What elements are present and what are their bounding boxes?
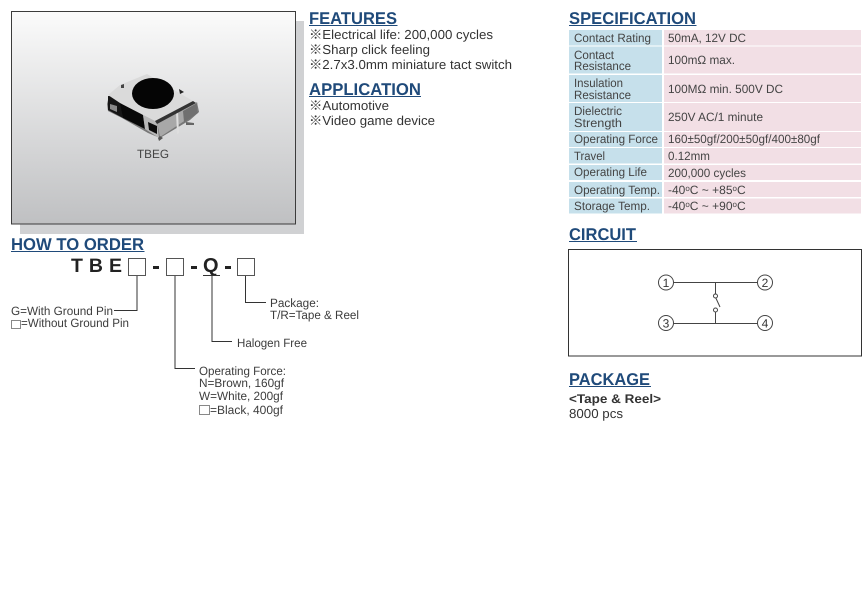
table: specification: Contact [574,48,615,62]
table: specification [569,30,861,214]
table: specification: Operating Temp. [574,183,660,197]
text: ground pin option [11,304,129,330]
text: ground pin option: G=With Ground Pin [11,304,113,318]
table: specification: 160±50gf/200±50gf/400±80gf [668,132,821,146]
panel: circuit diagram: 4 [762,316,769,330]
text: application list [309,98,435,128]
text: operating force option: W=White, 200gf [199,389,284,403]
table: specification: C [737,183,746,197]
heading: circuit: CIRCUIT [569,225,637,244]
table: specification: Resistance [574,88,631,102]
panel: product photo [12,12,304,234]
text: halogen free: Halogen Free [237,336,307,350]
text: features list: ※Electrical life: 200,000 cycles [309,27,494,42]
table: specification: C ~ +90 [690,199,733,213]
table: specification: -40 [668,183,685,197]
text: package option [270,296,359,322]
table: specification: Operating Life [574,165,647,179]
order connector lines [114,276,266,368]
label: TBEG: TBEG [137,147,169,161]
heading: package: PACKAGE [569,370,650,389]
table: specification: 100mΩ max. [668,53,735,67]
table: specification: C ~ +85 [690,183,733,197]
text: package details [569,392,661,421]
table: specification: Dielectric [574,104,622,118]
text: package details: 8000 pcs [569,406,624,421]
table: specification: Travel [574,149,605,163]
text: features list: ※2.7x3.0mm miniature tact switch [309,57,512,72]
panel: circuit diagram: 2 [762,276,769,290]
panel: circuit diagram: 3 [663,316,670,330]
heading: how to order: HOW TO ORDER [11,235,144,254]
table: specification: Resistance [574,59,631,73]
order code: TBE [71,255,122,277]
text: application list: ※Automotive [309,98,389,113]
table: specification: 50mA, 12V DC [668,31,746,45]
text: package option: T/R=Tape & Reel [270,308,359,322]
table: specification: -40 [668,199,685,213]
heading: specification: SPECIFICATION [569,9,696,28]
text: operating force option: N=Brown, 160gf [199,376,285,390]
table: specification: o [685,184,690,193]
text: operating force option [199,364,286,417]
table: specification: o [732,184,738,193]
table: specification: Strength [574,116,622,130]
table: specification: Contact Rating [574,31,651,45]
text: application list: ※Video game device [309,113,435,128]
panel: circuit diagram [568,250,862,356]
table: specification: 200,000 cycles [668,166,746,180]
text: operating force option: Operating Force: [199,364,286,378]
table: specification: o [732,200,738,209]
icon: TBEG tact switch [107,74,199,141]
text: features list [309,27,512,72]
text: package details: <Tape & Reel> [569,392,661,406]
heading: features: FEATURES [309,9,397,28]
table: specification: C [737,199,746,213]
heading: application: APPLICATION [309,80,421,99]
table: specification: 100MΩ min. 500V DC [668,82,783,96]
order code [71,255,254,277]
table: specification: o [685,200,690,209]
table: specification: 250V AC/1 minute [668,110,763,124]
table: specification: Insulation [574,76,623,90]
table: specification: Operating Force [574,132,658,146]
text: ground pin option: =Without Ground Pin [21,316,129,330]
text: package option: Package: [270,296,319,310]
text: features list: ※Sharp click feeling [309,42,430,57]
table: specification: Storage Temp. [574,199,650,213]
table: specification: 0.12mm [668,149,710,163]
panel: circuit diagram: 1 [663,276,670,290]
text: operating force option: =Black, 400gf [210,403,284,417]
order code: Q [203,255,219,277]
